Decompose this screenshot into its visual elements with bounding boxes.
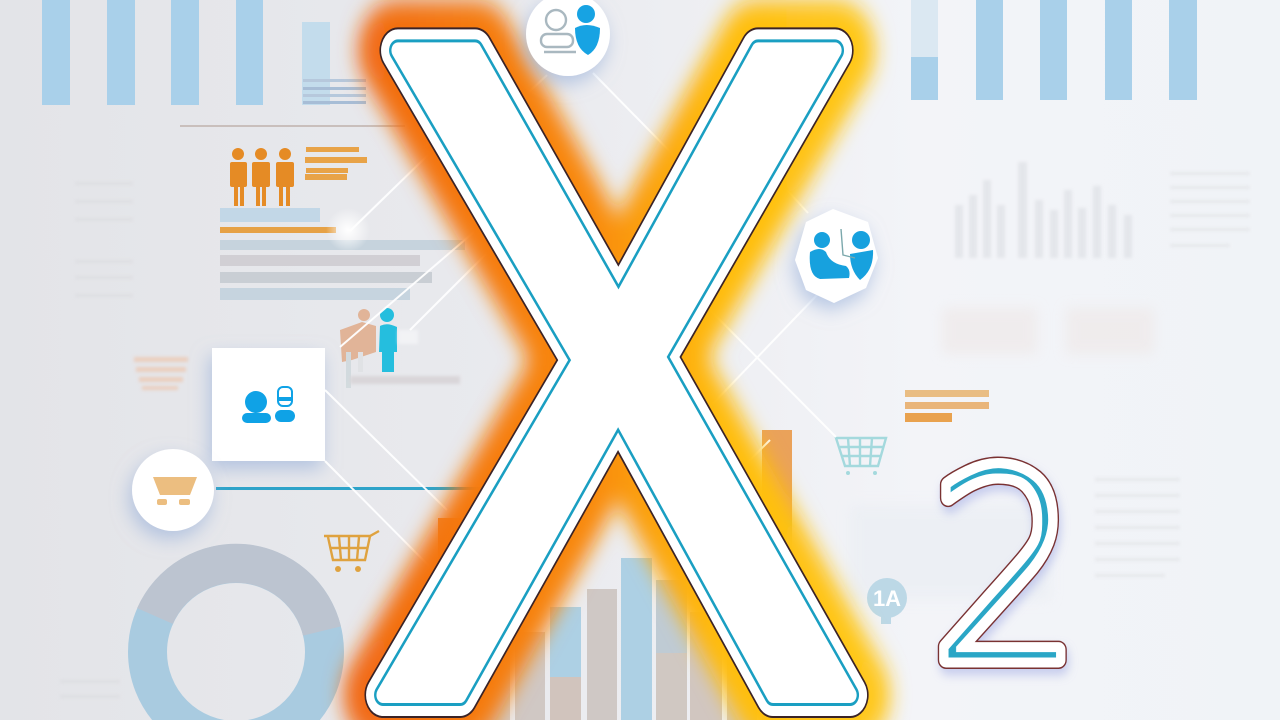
faint chart: upper right — [955, 162, 1132, 258]
stacked bars: left — [220, 208, 465, 300]
icon: three orange people — [230, 148, 294, 206]
letter X with outlines — [366, 0, 866, 720]
icon: faded people — [340, 309, 376, 388]
icon: white blob with cart — [132, 449, 214, 531]
blue group symbol — [810, 229, 873, 280]
icon: faded orange cart — [134, 357, 188, 390]
icon: teal cart — [836, 438, 886, 475]
2 outer outline with shadow: 2 — [929, 418, 1083, 720]
icon: right white hexagon with users — [795, 209, 878, 303]
bar chart: top right — [911, 0, 1197, 100]
faint footer line — [350, 376, 460, 384]
2 white band: 2 — [929, 418, 1083, 720]
blue user — [575, 5, 600, 55]
panel: white card with icon — [212, 348, 325, 461]
cart symbol — [153, 477, 197, 505]
text lines: orange, left — [305, 147, 367, 180]
small blurred tab — [398, 330, 418, 344]
icon: top white circle with users — [526, 0, 610, 76]
connector: blue line — [216, 487, 486, 490]
text lines: orange, right — [905, 390, 989, 422]
chart: donut — [148, 563, 324, 720]
bar chart: bottom centre — [438, 430, 792, 720]
icon: faint blue badge: 1A — [873, 586, 901, 611]
icon: orange shopping cart — [324, 531, 379, 572]
2 blue core: 2 — [929, 418, 1083, 720]
icon: faint blue badge — [867, 578, 907, 624]
connector lines — [325, 73, 836, 577]
numeral 2 with outlines — [929, 418, 1083, 720]
grey outlined user — [541, 10, 576, 52]
icon: blue users — [242, 387, 295, 423]
halo: white spark — [326, 208, 370, 252]
faint panels: right — [850, 308, 1154, 600]
bar chart: top left — [42, 0, 366, 105]
faint text lines: far right and left — [60, 172, 1250, 698]
rule line — [180, 125, 405, 127]
icon: teal person — [379, 308, 397, 372]
